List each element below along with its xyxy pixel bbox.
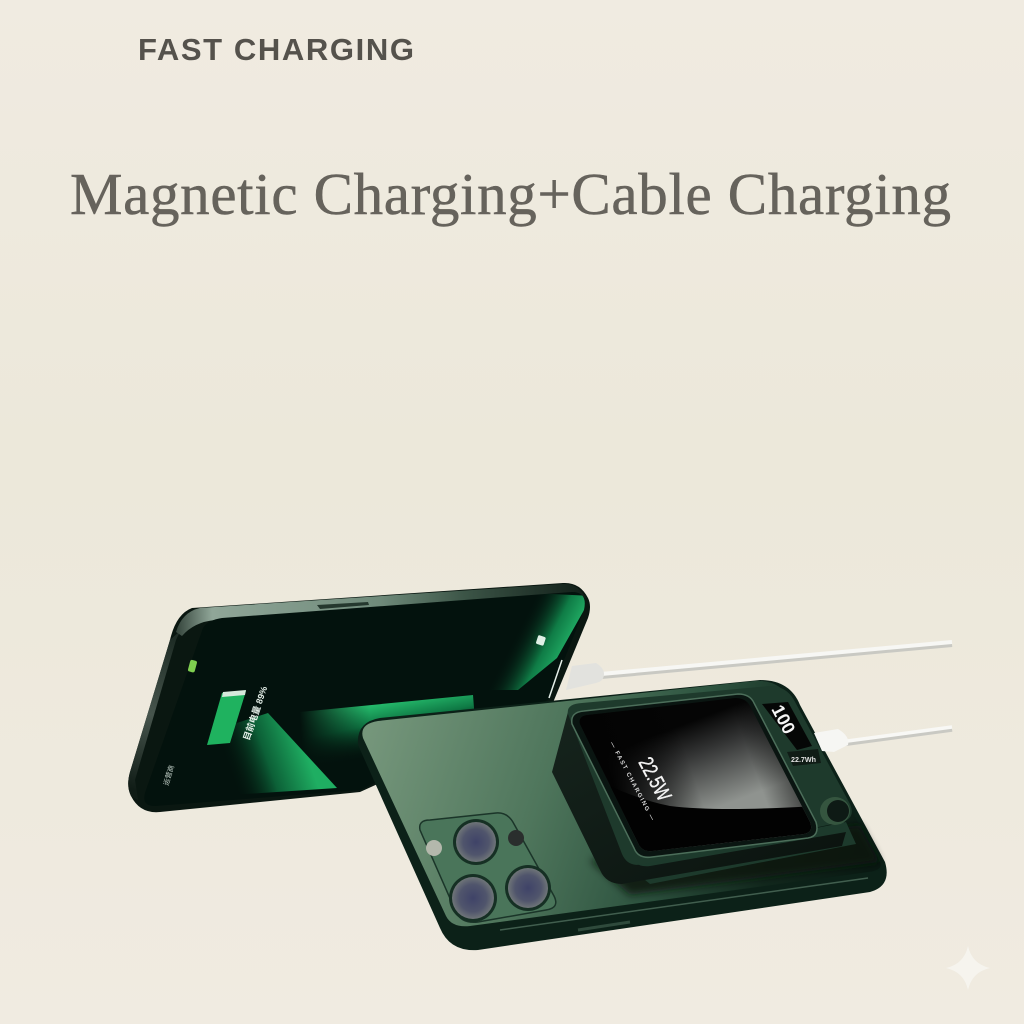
- bottom rim highlight: [500, 878, 868, 930]
- cable: lower charging cable: [814, 727, 952, 752]
- title: magnetic and cable charging: Magnetic Charging+Cable Charging: [70, 161, 951, 227]
- screen glow: triangle: [231, 713, 337, 794]
- bank side shell: [552, 712, 846, 884]
- phone body side: [358, 680, 887, 950]
- camera module: [420, 813, 556, 922]
- power bank: [552, 686, 880, 895]
- digital display: [762, 701, 812, 750]
- flash: [426, 840, 442, 856]
- battery icon: [207, 691, 246, 745]
- screen glow: top right: [497, 594, 585, 690]
- phone screen: [212, 592, 585, 794]
- battery text: 目前电量 89%: [240, 685, 269, 742]
- corner icon: [536, 635, 546, 646]
- power button: [820, 797, 850, 825]
- bank top: [568, 686, 852, 865]
- cable: upper charging cable: [566, 642, 952, 690]
- glass screen: [580, 698, 812, 852]
- capacity tag: [787, 749, 821, 766]
- lens right: [505, 865, 551, 911]
- glint line: [549, 660, 562, 698]
- phone: rear view with power bank: [358, 680, 887, 950]
- clock text: 运营商: [161, 764, 176, 787]
- digital display: 100: [767, 701, 799, 737]
- phone back: [362, 681, 881, 926]
- status indicator: [188, 659, 197, 673]
- lens bottom: [449, 874, 497, 922]
- phone: front view with green screen: [128, 583, 600, 815]
- heading: fast charging label: FAST CHARGING: [138, 32, 414, 67]
- lens top: [453, 819, 499, 865]
- side button: [578, 922, 630, 930]
- sensor: [508, 830, 524, 846]
- battery cap: [222, 690, 246, 697]
- phone left edge: [128, 622, 190, 800]
- power button: [317, 602, 369, 609]
- phone frame: [128, 583, 590, 812]
- screen glow: centre band: [302, 695, 474, 752]
- fast charging label: — FAST CHARGING —: [608, 741, 655, 822]
- capacity tag: 22.7Wh: [791, 757, 816, 764]
- bank shadow: [590, 825, 880, 895]
- band left fade: [296, 706, 366, 760]
- wattage label: 22.5W: [634, 754, 676, 805]
- phone top edge highlight: [176, 584, 586, 636]
- bank lower strip: [628, 822, 856, 884]
- sparkle watermark: [946, 946, 990, 990]
- glass rim: [572, 694, 817, 857]
